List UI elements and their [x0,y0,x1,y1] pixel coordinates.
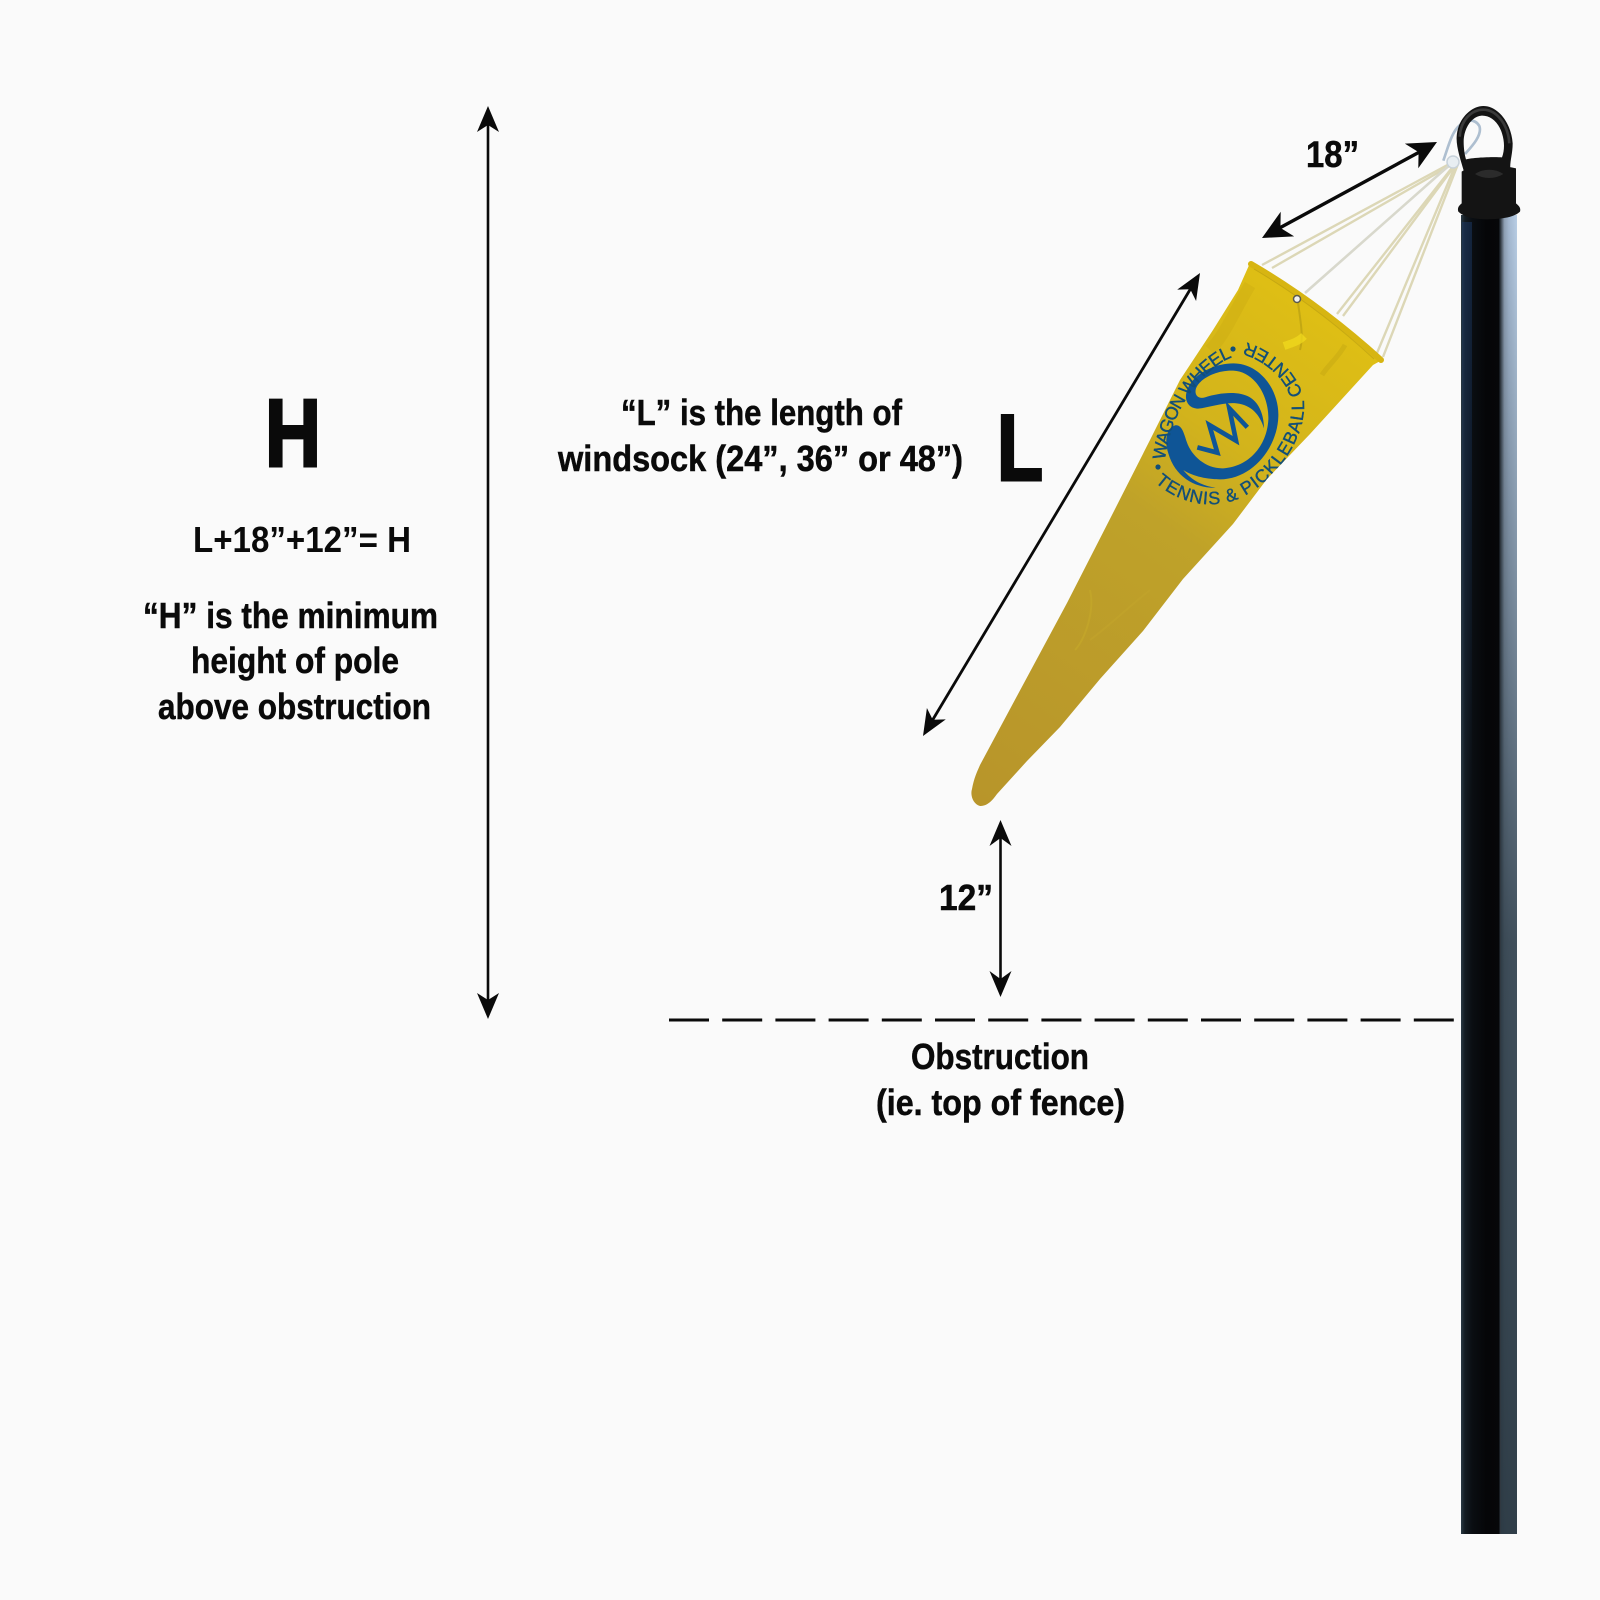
cap recess [1475,170,1503,178]
obstruction dashed line [669,1018,1454,1022]
pole [1461,215,1517,1534]
length arrow L [914,267,1209,742]
obstruction label [876,1036,1125,1123]
logo text: wagon wheel: WAGON WHEEL [1152,348,1232,458]
12 inch arrow [990,820,1012,997]
logo text: tennis and pickleball center: TENNIS & PICKLEBALL CENTER [1158,342,1304,505]
pole cap with ring and hook [1443,106,1520,219]
hem [1251,264,1381,360]
windsock [971,261,1384,806]
H description: “H” is the minimum [143,595,438,636]
L description: “L” is the length of [621,392,903,433]
L description: windsock (24”, 36” or 48”) [557,438,963,479]
ring highlight [1460,110,1509,143]
H description: height of pole [191,640,399,681]
grommet [1294,296,1300,302]
logo [1152,342,1304,505]
18 inch arrow [1255,130,1444,250]
suspension cords [1262,156,1459,357]
obstruction label: Obstruction [911,1036,1089,1077]
logo bullets [1155,346,1236,470]
L description [557,392,963,479]
fabric folds [1075,285,1345,650]
snap hook [1443,120,1480,161]
H description [143,595,438,727]
label 18 inches: 18” [1306,134,1359,175]
obstruction label: (ie. top of fence) [876,1082,1125,1123]
H description: above obstruction [158,686,431,727]
ring strap [1457,106,1513,172]
heading L: L [997,395,1043,500]
logo swoosh [1166,363,1278,488]
heading H: H [265,380,321,487]
formula: L+18”+12”= H [193,519,411,560]
height arrow H [477,106,499,1019]
sock body [971,263,1382,806]
cap body [1458,166,1520,219]
label 12 inches: 12” [939,877,993,918]
